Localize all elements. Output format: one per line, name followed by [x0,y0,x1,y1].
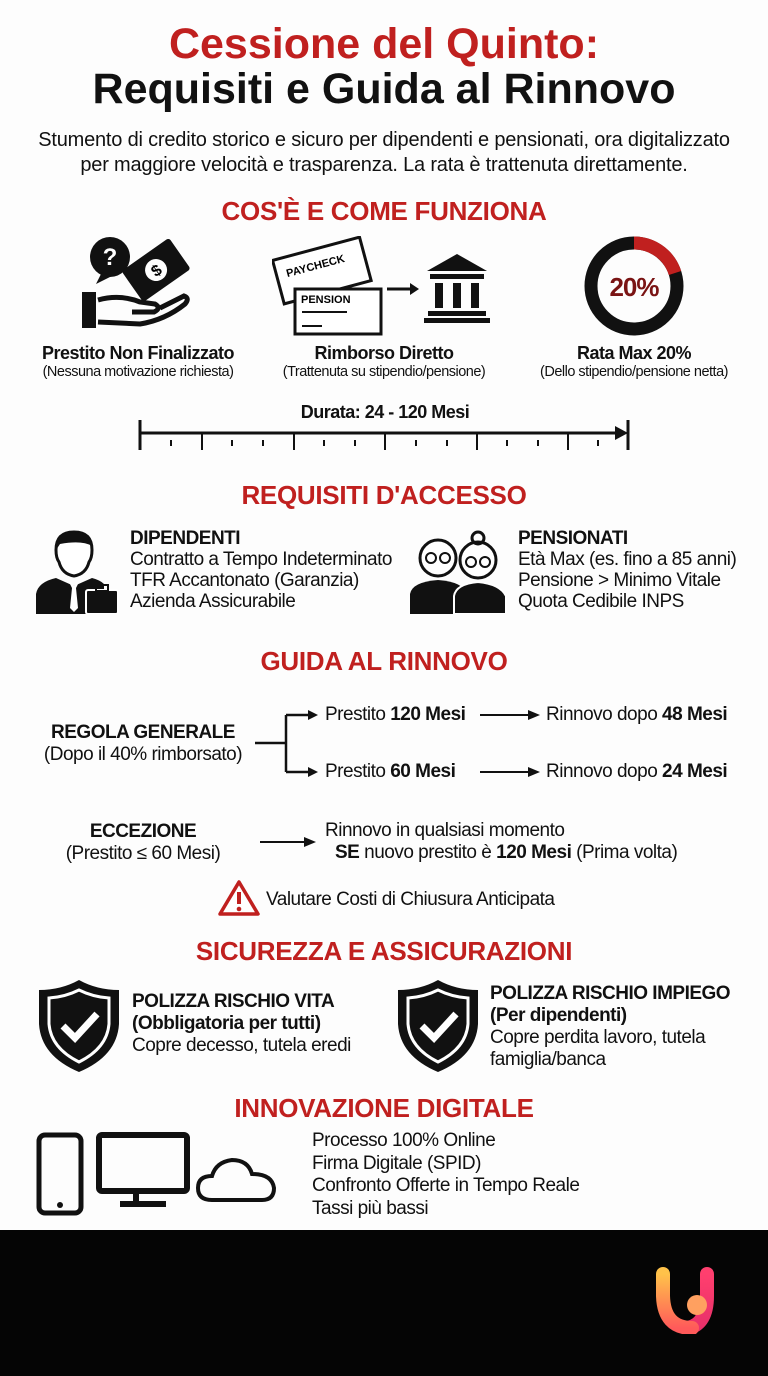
timeline: durata [138,402,630,450]
icon: paycheck to bank: PAYCHECK [285,253,346,280]
eccezione: (Prestito ≤ 60 Mesi) [66,843,220,864]
subtitle [38,129,730,176]
text: pensionati: Quota Cedibile INPS [518,591,684,612]
text: eccezione detail: Rinnovo in qualsiasi momento [325,820,564,841]
text: prestito 120: Prestito 120 Mesi [325,704,465,725]
eccezione: ECCEZIONE [90,821,196,842]
text: polizza impiego [490,983,730,1070]
heading: requisiti d'accesso: REQUISITI D'ACCESSO [241,480,527,510]
text: eccezione detail [325,820,677,863]
text: polizza vita: POLIZZA RISCHIO VITA [132,991,334,1012]
text: dipendenti: DIPENDENTI [130,528,240,549]
icon: employee [36,530,117,614]
heading: guida al rinnovo: GUIDA AL RINNOVO [260,646,508,676]
text: polizza impiego: Copre perdita lavoro, tutela [490,1027,705,1048]
arrows: regola generale branches [255,710,540,777]
icon: donut 20% [584,236,684,336]
icon: pensioners [410,530,505,614]
timeline: durata: Durata: 24 - 120 Mesi [301,402,469,422]
icon: paycheck to bank: PENSION [301,294,351,306]
text: dipendenti [130,528,392,612]
text: polizza vita: (Obbligatoria per tutti) [132,1013,321,1034]
eccezione [66,821,220,864]
text: dipendenti: TFR Accantonato (Garanzia) [130,570,359,591]
regola generale [44,722,242,765]
icon: donut 20%: 20% [609,272,659,302]
text: polizza impiego: famiglia/banca [490,1049,606,1070]
label: rimborso diretto: Rimborso Diretto [314,343,454,363]
text: polizza vita [132,991,351,1056]
heading: cos'è e come funziona: COS'È E COME FUNZIONA [222,196,546,226]
text: pensionati: Età Max (es. fino a 85 anni) [518,549,736,570]
icon: shield 2 [398,980,478,1072]
text: pensionati [518,528,736,612]
title [93,20,675,113]
text: prestito 60: Prestito 60 Mesi [325,761,455,782]
label: prestito non finalizzato: Prestito Non Finalizzato [42,343,234,363]
text: pensionati: Pensione > Minimo Vitale [518,570,721,591]
text: rinnovo 24: Rinnovo dopo 24 Mesi [546,761,727,782]
icon: hand with money [82,237,190,328]
icon: hand with money: ? [103,244,117,271]
heading: sicurezza: SICUREZZA E ASSICURAZIONI [196,936,572,966]
label: rimborso diretto [283,343,485,380]
regola generale: REGOLA GENERALE [51,722,235,743]
subtitle: Stumento di credito storico e sicuro per dipendenti e pensionati, ora digitalizzato [38,129,730,151]
label: rata max [540,343,728,380]
regola generale: (Dopo il 40% rimborsato) [44,744,242,765]
text: digital list: Tassi più bassi [312,1198,428,1219]
text: dipendenti: Contratto a Tempo Indeterminato [130,549,392,570]
subtitle: per maggiore velocità e trasparenza. La rata è trattenuta direttamente. [80,154,688,176]
text: rinnovo 48: Rinnovo dopo 48 Mesi [546,704,727,725]
label: rata max: Rata Max 20% [577,343,691,363]
text: polizza impiego: POLIZZA RISCHIO IMPIEGO [490,983,730,1004]
text: digital list: Confronto Offerte in Tempo Reale [312,1175,579,1196]
logo [656,1267,714,1334]
warning: Valutare Costi di Chiusura Anticipata [266,889,554,910]
label: rimborso diretto: (Trattenuta su stipendio/pensione) [283,364,485,380]
warning [218,880,555,916]
icon: shield 1 [39,980,119,1072]
icon: paycheck to bank [272,236,490,336]
text: digital list: Firma Digitale (SPID) [312,1153,481,1174]
text: pensionati: PENSIONATI [518,528,628,549]
text: dipendenti: Azienda Assicurabile [130,591,295,612]
title: Cessione del Quinto: [169,20,599,68]
title: Requisiti e Guida al Rinnovo [93,65,675,113]
text: eccezione detail: SE nuovo prestito è 120 Mesi (Prima volta) [335,842,677,863]
arrow: eccezione [260,837,316,847]
text: digital list [312,1130,580,1219]
label: prestito non finalizzato [42,343,234,380]
text: polizza impiego: (Per dipendenti) [490,1005,627,1026]
footer [0,1230,768,1376]
heading: innovazione digitale: INNOVAZIONE DIGITALE [234,1093,534,1123]
icon: hand with money: $ [148,262,166,281]
label: prestito non finalizzato: (Nessuna motivazione richiesta) [43,364,233,380]
icons: devices [36,1132,276,1216]
text: digital list: Processo 100% Online [312,1130,495,1151]
label: rata max: (Dello stipendio/pensione netta) [540,364,728,380]
text: polizza vita: Copre decesso, tutela eredi [132,1035,351,1056]
